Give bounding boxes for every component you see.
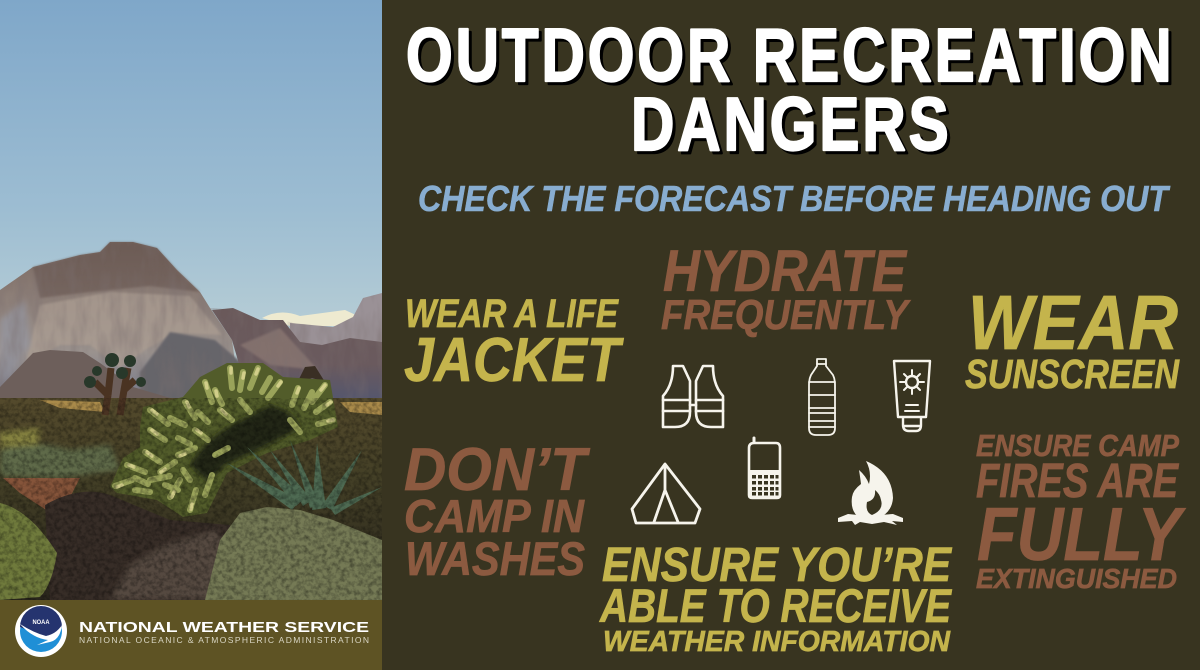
title [406,15,1172,167]
icon: NOAA logo [15,605,67,657]
background panel [382,0,1200,670]
tip: ensure you're able to receive weather information: ABLE TO RECEIVE [599,579,952,632]
rock face highlight [25,292,222,368]
small hill [0,350,170,398]
title: OUTDOOR RECREATION [406,15,1172,98]
icon: campfire [838,461,903,525]
tip: ensure you're able to receive weather information [599,539,953,658]
red soil [3,478,80,510]
icon: water bottle [809,359,835,435]
icon: life jacket [663,366,723,427]
distant tree [300,366,324,380]
ground [0,398,382,600]
tip: hydrate frequently [661,239,911,339]
icon: cell phone [749,438,780,498]
footer band [0,600,382,670]
tip: don't camp in washes: DON’T [404,436,590,503]
tip: hydrate frequently: HYDRATE [663,239,908,304]
sky [0,0,382,362]
tip: hydrate frequently: FREQUENTLY [661,291,911,339]
tip: wear a life jacket: JACKET [404,326,624,395]
far mountain [290,293,382,345]
tip: don't camp in washes: WASHES [405,532,585,585]
icon: sunscreen tube [894,361,930,431]
tip: wear sunscreen: WEAR [968,280,1178,366]
sage shrub [205,507,382,600]
joshua tree [84,353,146,415]
golden grass [40,400,382,415]
tip: ensure camp fires are fully extinguished: EXTINGUISHED [976,563,1177,594]
tip: wear sunscreen [965,280,1180,397]
title: DANGERS [631,84,949,167]
tip: don't camp in washes [404,436,590,585]
lower slope [140,331,239,398]
mountain texture [0,294,382,390]
distant cloud [262,310,358,326]
icon: tent [632,464,700,523]
panel: landscape photo [0,0,382,600]
yucca [227,440,382,515]
tip: wear a life jacket: WEAR A LIFE [405,292,619,336]
tip: ensure you're able to receive weather information: ENSURE YOU’RE [602,539,953,592]
tip: wear a life jacket [404,292,624,395]
haze on left [0,302,30,376]
tip: ensure camp fires are fully extinguished: ENSURE CAMP [976,428,1179,463]
logo text: NOAA: NATIONAL OCEANIC & ATMOSPHERIC ADMINISTRATION [79,635,369,645]
main mountain [0,242,240,400]
rock face shading [33,242,200,298]
gray twigs [111,530,222,600]
green scrub [0,428,120,478]
tip: don't camp in washes: CAMP IN [404,490,585,542]
left shrub [0,503,57,600]
logo text: National Weather Service: NATIONAL WEATHER SERVICE [79,619,369,636]
dark brush [45,492,245,600]
photo texture [0,398,382,600]
tip: ensure camp fires are fully extinguished [976,428,1186,594]
ridge highlight [240,328,318,370]
right ridge [212,308,382,402]
tip: ensure you're able to receive weather information: WEATHER INFORMATION [603,626,951,658]
icon: NOAA logo: NOAA [32,620,50,626]
cholla cactus [110,363,338,517]
